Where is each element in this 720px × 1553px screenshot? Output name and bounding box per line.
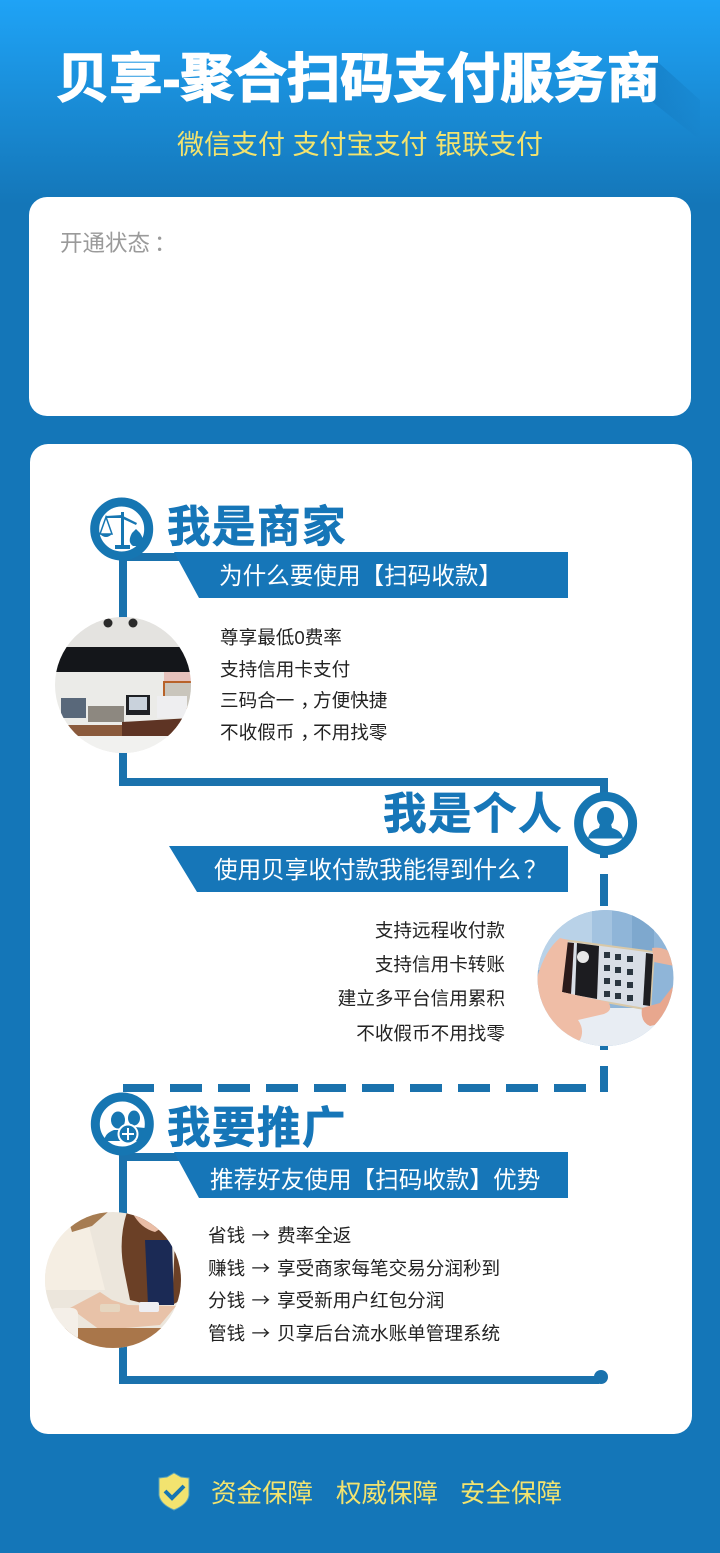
icon: group [95,1097,149,1151]
list: promote benefits: 费率全返 [277,1225,351,1246]
guarantee labels: 权威保障 [336,1480,438,1508]
list: personal benefits: 建立多平台信用累积 [338,988,505,1009]
section: promote [45,1097,568,1348]
guarantee labels: 资金保障 [211,1480,313,1508]
list: personal benefits: 支持远程收付款 [375,920,505,941]
icon: shield [159,1473,189,1510]
section: merchant [55,502,568,753]
list: merchant benefits: 尊享最低0费率 [220,627,342,648]
heading: promote: 我要推广 [167,1105,347,1153]
heading: merchant: 我是商家 [167,504,347,552]
list: merchant benefits [220,627,388,743]
list: merchant benefits: 支持信用卡支付 [220,659,350,680]
banner: merchant: 为什么要使用【扫码收款】 [219,563,502,590]
photo: phone in hands [537,910,674,1047]
list: personal benefits: 不收假币不用找零 [356,1023,505,1044]
list: promote benefits: 分钱 [208,1290,245,1311]
list: promote benefits: 贝享后台流水账单管理系统 [277,1323,500,1344]
guarantee labels [211,1480,562,1508]
banner: promote: 推荐好友使用【扫码收款】优势 [210,1167,540,1194]
banner: promote [174,1152,568,1198]
panel: status [29,197,691,416]
list: promote benefits: → [252,1319,270,1346]
heading: personal: 我是个人 [383,791,563,839]
section: personal [169,791,674,1047]
banner: personal: 使用贝享收付款我能得到什么？ [214,857,547,884]
list: merchant benefits: 三码合一 ，方便快捷 [220,690,387,711]
photo: store [55,617,192,753]
title: 贝享-聚合扫码支付服务商 [56,50,660,109]
list: promote benefits: 赚钱 [208,1258,245,1279]
banner: merchant [174,552,568,598]
list: promote benefits: 享受新用户红包分润 [277,1290,444,1311]
list: personal benefits: 支持信用卡转账 [375,954,505,975]
list: promote benefits: → [252,1254,270,1281]
subtitle: 微信支付 支付宝支付 银联支付 [177,130,543,160]
list: promote benefits: 享受商家每笔交易分润秒到 [277,1258,500,1279]
list: promote benefits [208,1221,500,1346]
photo: women with phones [45,1212,181,1348]
title long shadow [650,55,700,140]
icon: scales [95,502,149,556]
banner: personal [169,846,568,892]
footer guarantees [159,1473,562,1510]
list: promote benefits: → [252,1221,270,1248]
list: promote benefits: 省钱 [208,1225,245,1246]
connector lines [119,553,608,1384]
icon: person [579,796,633,850]
guarantee labels: 安全保障 [460,1480,562,1508]
status label: 开通状态： [60,231,177,256]
list: personal benefits [338,920,505,1044]
list: promote benefits: 管钱 [208,1323,245,1344]
list: merchant benefits: 不收假币 ，不用找零 [220,722,388,743]
list: promote benefits: → [252,1286,270,1313]
panel: main [30,444,692,1434]
